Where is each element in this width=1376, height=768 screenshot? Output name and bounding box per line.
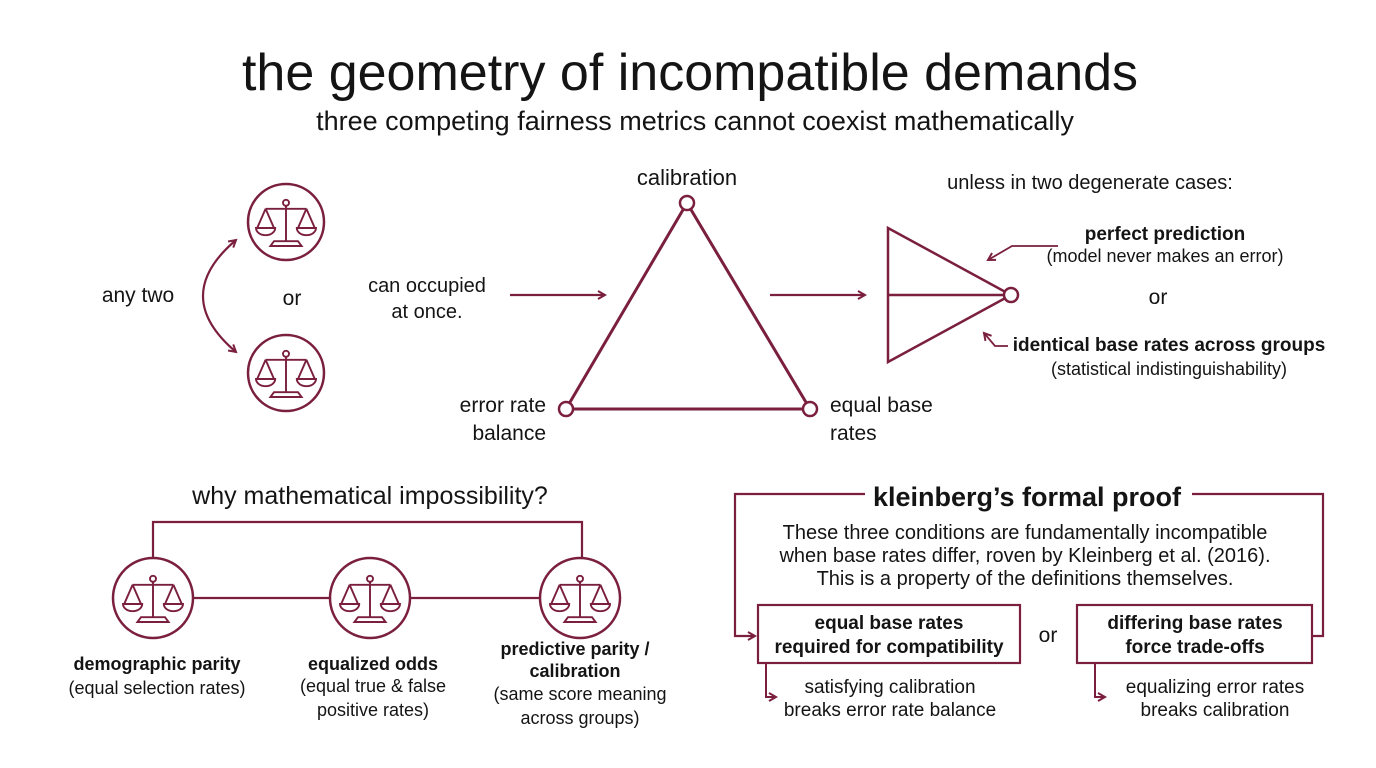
panel: kleinberg's formal proof: breaks error rate balance <box>784 700 996 721</box>
triangle diagram: balance <box>472 422 546 445</box>
degenerate cases: (model never makes an error) <box>1046 246 1284 266</box>
icon: scale top <box>248 184 324 260</box>
panel: kleinberg's formal proof: equalizing error rates <box>1126 677 1304 698</box>
panel: why mathematical impossibility: positive rates) <box>317 700 429 720</box>
box: equal base rates: required for compatibility <box>774 637 1004 658</box>
arrow <box>510 294 605 296</box>
title: the geometry of incompatible demands <box>242 44 1138 102</box>
text: can occupied: can occupied <box>368 275 486 297</box>
panel: why mathematical impossibility: predictive parity / <box>500 639 650 659</box>
panel: why mathematical impossibility <box>68 482 667 728</box>
icon: predictive parity <box>540 558 620 638</box>
degenerate cases: unless in two degenerate cases: <box>947 172 1233 194</box>
box: equal base rates <box>758 605 1020 663</box>
triangle diagram: equal base <box>830 394 933 417</box>
box: differing base rates: differing base rates <box>1107 613 1283 634</box>
curved arrow <box>203 240 236 352</box>
panel: kleinberg's formal proof: These three conditions are fundamentally incompatible <box>783 522 1267 544</box>
degenerate cases: identical base rates across groups <box>1013 335 1325 356</box>
panel: why mathematical impossibility: why mathematical impossibility? <box>191 482 548 510</box>
arrow <box>770 294 865 296</box>
box: differing base rates: force trade-offs <box>1125 637 1265 658</box>
panel: kleinberg's formal proof: breaks calibration <box>1141 700 1289 721</box>
degenerate cases: or <box>1149 286 1167 309</box>
subtitle: three competing fairness metrics cannot coexist mathematically <box>316 106 1074 136</box>
degenerate cases <box>888 172 1325 379</box>
triangle diagram <box>460 165 933 445</box>
degenerate cases: perfect prediction <box>1085 224 1245 245</box>
box: differing base rates <box>1077 605 1312 663</box>
panel: why mathematical impossibility: demographic parity <box>73 654 241 674</box>
triangle diagram: calibration <box>637 165 737 190</box>
panel: why mathematical impossibility: equalized odds <box>308 654 438 674</box>
panel: why mathematical impossibility: (same score meaning <box>493 684 667 704</box>
panel: why mathematical impossibility: (equal selection rates) <box>68 678 246 698</box>
box: equal base rates: equal base rates <box>815 613 963 634</box>
panel: kleinberg's formal proof: This is a property of the definitions themselves. <box>817 568 1233 590</box>
panel: any two <box>102 184 324 411</box>
icon: equalized odds <box>330 558 410 638</box>
panel: why mathematical impossibility: (equal true & false <box>300 676 446 696</box>
degenerate cases: (statistical indistinguishability) <box>1051 359 1287 379</box>
panel: kleinberg's formal proof: satisfying calibration <box>804 677 976 698</box>
panel: kleinberg's formal proof <box>735 482 1323 721</box>
icon: scale bottom <box>248 335 324 411</box>
text: can occupied <box>368 275 486 323</box>
triangle diagram: error rate <box>460 394 546 417</box>
panel: any two: or <box>283 287 301 310</box>
text: can occupied: at once. <box>391 301 463 323</box>
triangle diagram: rates <box>830 422 877 445</box>
panel: any two: any two <box>102 284 174 307</box>
panel: why mathematical impossibility: across groups) <box>520 708 640 728</box>
icon: demographic parity <box>113 558 193 638</box>
panel: kleinberg's formal proof: or <box>1039 624 1057 647</box>
panel: why mathematical impossibility: calibration <box>529 661 621 681</box>
panel: kleinberg's formal proof: kleinberg’s formal proof <box>873 482 1182 512</box>
panel: kleinberg's formal proof: when base rates differ, roven by Kleinberg et al. (2016). <box>778 545 1271 567</box>
